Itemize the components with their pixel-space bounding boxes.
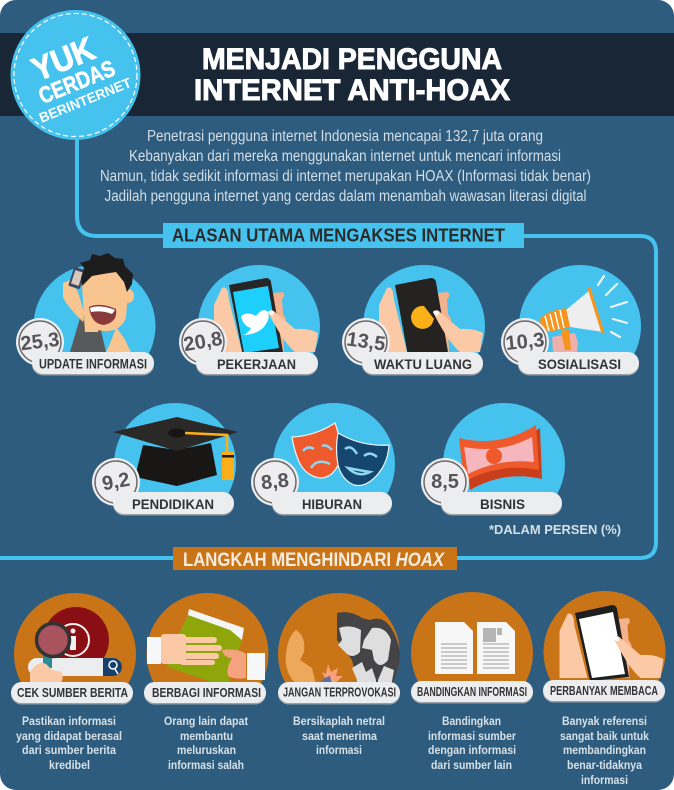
description: informasi bbox=[581, 773, 628, 787]
label pill: JANGAN TERPROVOKASI bbox=[283, 686, 396, 700]
intro text: Penetrasi pengguna internet Indonesia mencapai 132,7 juta orang bbox=[147, 128, 543, 145]
label pill bbox=[411, 681, 533, 704]
step: jangan terprovokasi bbox=[278, 593, 400, 757]
description: dari sumber lain bbox=[431, 758, 512, 772]
label pill: BANDINGKAN INFORMASI bbox=[417, 685, 527, 699]
intro text: Kebanyakan dari mereka menggunakan internet untuk mencari informasi bbox=[129, 148, 561, 165]
icon: shouting man with phone bbox=[63, 253, 134, 352]
number badge bbox=[421, 458, 469, 506]
number badge: 13,5 bbox=[345, 328, 387, 356]
label pill: CEK SUMBER BERITA bbox=[17, 686, 128, 700]
footnote: *DALAM PERSEN (%) bbox=[489, 522, 621, 537]
description: Bersikaplah netral bbox=[293, 714, 385, 728]
title band bbox=[0, 33, 674, 116]
intro text bbox=[100, 128, 591, 205]
description: membantu bbox=[180, 729, 233, 743]
label pill bbox=[278, 682, 400, 704]
number badge: 10,3 bbox=[504, 329, 546, 355]
description bbox=[293, 714, 385, 757]
label pill: UPDATE INFORMASI bbox=[39, 356, 147, 372]
description: kredibel bbox=[49, 758, 90, 772]
icon: bird bbox=[241, 310, 269, 335]
step: bandingkan informasi bbox=[411, 592, 533, 772]
icon: two documents bbox=[435, 622, 515, 674]
number badge bbox=[251, 458, 299, 506]
label pill bbox=[441, 492, 562, 516]
badge: yuk cerdas berinternet bbox=[10, 10, 140, 140]
item: pendidikan bbox=[92, 403, 238, 525]
label pill bbox=[196, 352, 318, 376]
number badge: 20,8 bbox=[182, 328, 224, 356]
step: perbanyak membaca bbox=[543, 591, 666, 787]
number badge bbox=[342, 318, 390, 366]
description: dari sumber berita bbox=[22, 743, 116, 757]
description: yang didapat berasal bbox=[16, 729, 122, 743]
label pill: HIBURAN bbox=[302, 497, 362, 512]
label pill: SOSIALISASI bbox=[538, 357, 621, 372]
icon: phone with pacman bbox=[379, 278, 483, 356]
description bbox=[164, 714, 248, 772]
intro text: Namun, tidak sedikit informasi di internet merupakan HOAX (Informasi tidak benar) bbox=[100, 168, 591, 185]
icon: megaphone bbox=[540, 276, 627, 352]
description: informasi sumber bbox=[428, 729, 516, 743]
label pill: PENDIDIKAN bbox=[132, 497, 214, 512]
item: update informasi bbox=[16, 253, 156, 387]
description: dengan informasi bbox=[428, 743, 516, 757]
number badge bbox=[92, 458, 140, 506]
icon: theatre masks bbox=[292, 423, 389, 486]
item: pekerjaan bbox=[179, 265, 320, 387]
item: hiburan bbox=[251, 403, 395, 525]
icon: money stack bbox=[459, 425, 542, 490]
label pill: WAKTU LUANG bbox=[374, 357, 472, 372]
label pill bbox=[543, 680, 665, 702]
title: MENJADI PENGGUNA bbox=[202, 43, 502, 76]
badge: yuk cerdas berinternet: CERDAS bbox=[35, 55, 119, 109]
label pill: PEKERJAAN bbox=[217, 357, 296, 372]
badge: yuk cerdas berinternet: BERINTERNET bbox=[37, 74, 134, 126]
number badge: 9,2 bbox=[100, 469, 132, 495]
icon: hands holding phone bbox=[560, 605, 664, 681]
description: benar-tidaknya bbox=[567, 758, 642, 772]
icon: graduation cap bbox=[113, 417, 238, 486]
icon: phone with twitter bird bbox=[214, 278, 318, 356]
step: cek sumber berita bbox=[11, 593, 136, 772]
number badge: 8,5 bbox=[431, 471, 459, 493]
title: INTERNET ANTI-HOAX bbox=[194, 74, 510, 107]
label pill bbox=[362, 352, 483, 376]
label pill bbox=[144, 682, 266, 704]
connector line bbox=[0, 135, 656, 558]
number badge bbox=[179, 318, 227, 366]
description bbox=[560, 714, 649, 787]
description: sangat baik untuk bbox=[560, 729, 649, 743]
number badge: 8,8 bbox=[260, 470, 290, 494]
description: Bandingkan bbox=[442, 714, 501, 728]
icon: magnifier and search bar bbox=[28, 607, 122, 682]
badge: yuk cerdas berinternet: YUK bbox=[26, 30, 100, 88]
label pill bbox=[113, 492, 234, 516]
title bbox=[194, 43, 510, 107]
heading: langkah menghindari hoax: LANGKAH MENGHINDARI HOAX bbox=[183, 549, 445, 571]
item: waktu luang bbox=[342, 265, 485, 387]
description: saat menerima bbox=[302, 729, 377, 743]
label pill: BERBAGI INFORMASI bbox=[152, 686, 261, 700]
label pill bbox=[272, 492, 392, 516]
description: Orang lain dapat bbox=[164, 714, 248, 728]
item: sosialisasi bbox=[501, 265, 641, 387]
intro text: Jadilah pengguna internet yang cerdas dalam menambah wawasan literasi digital bbox=[104, 188, 586, 205]
description: Pastikan informasi bbox=[22, 714, 116, 728]
heading: alasan utama: ALASAN UTAMA MENGAKSES INTERNET bbox=[172, 226, 505, 246]
description bbox=[428, 714, 516, 772]
description: membandingkan bbox=[563, 743, 646, 757]
description: meluruskan bbox=[177, 743, 236, 757]
description: Banyak referensi bbox=[562, 714, 647, 728]
icon: pacman bbox=[411, 306, 434, 329]
icon: hands sharing folder bbox=[147, 609, 265, 687]
description bbox=[16, 714, 122, 772]
icon: arguing faces bbox=[286, 612, 400, 682]
item: bisnis bbox=[421, 403, 565, 525]
label pill: BISNIS bbox=[480, 497, 525, 512]
step: berbagi informasi bbox=[144, 593, 268, 772]
number badge: 25,3 bbox=[19, 329, 61, 355]
label pill bbox=[11, 682, 133, 704]
description: informasi salah bbox=[168, 758, 244, 772]
description: informasi bbox=[316, 743, 362, 757]
